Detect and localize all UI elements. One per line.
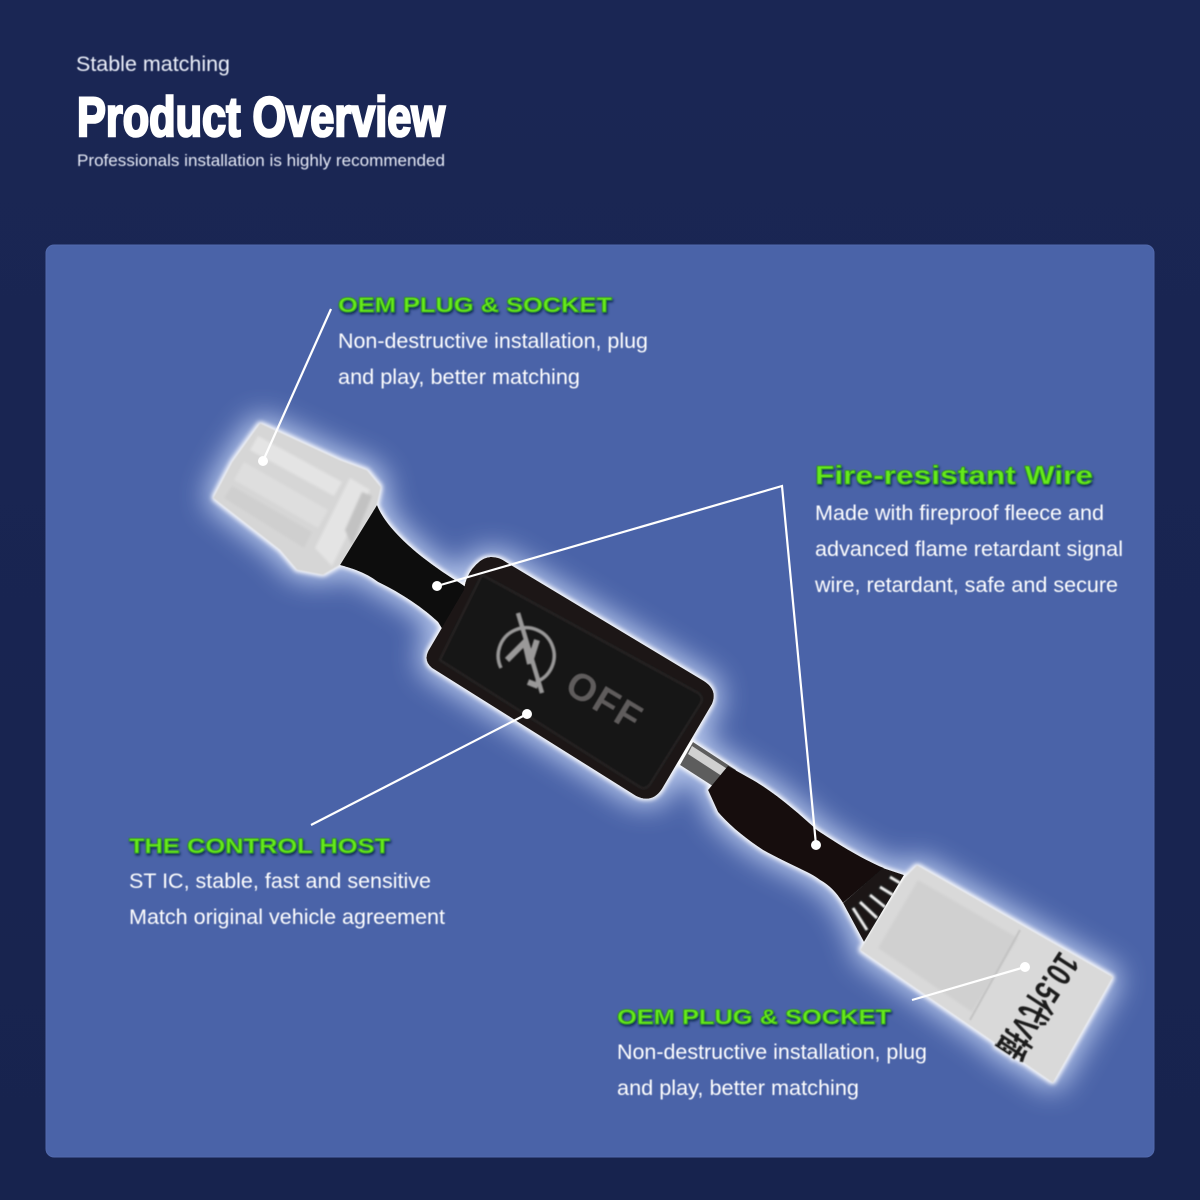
callout body: ST IC, stable, fast and sensitive	[129, 869, 431, 893]
off label: OFF	[558, 663, 650, 741]
callout: OEM plug top	[338, 294, 648, 389]
callout body	[814, 501, 1123, 597]
leader: fire-resistant wire	[437, 486, 816, 845]
callout heading: Fire-resistant Wire	[815, 460, 1093, 490]
header block	[76, 53, 445, 170]
leader lines	[263, 309, 1025, 1000]
callout body: wire, retardant, safe and secure	[814, 573, 1118, 597]
callout heading: OEM PLUG & SOCKET	[338, 294, 612, 317]
callout body: and play, better matching	[617, 1076, 859, 1100]
wire: lower	[708, 766, 884, 903]
wire: upper	[340, 505, 485, 650]
leader: right plug	[912, 967, 1025, 1000]
wire strands	[843, 868, 904, 942]
metal pin	[680, 742, 736, 792]
callout: fire-resistant wire	[814, 460, 1123, 597]
title: Product Overview	[77, 85, 445, 148]
leader dots	[258, 456, 1030, 972]
callout body: Non-destructive installation, plug	[617, 1040, 927, 1064]
callout body: Match original vehicle agreement	[129, 905, 445, 929]
panel: product diagram	[46, 245, 1154, 1157]
callout body	[338, 329, 648, 389]
callout heading: OEM PLUG & SOCKET	[617, 1006, 891, 1029]
callout: control host	[129, 835, 445, 929]
callout body: and play, better matching	[338, 365, 580, 389]
callout heading: THE CONTROL HOST	[129, 835, 390, 858]
subtitle: Professionals installation is highly recommended	[77, 151, 445, 170]
product: cable assembly	[213, 423, 1113, 1083]
callout: OEM plug bottom	[617, 1006, 927, 1100]
control host	[426, 557, 714, 799]
connector: right plug	[860, 865, 1113, 1083]
icon: auto stop off	[498, 613, 554, 693]
callout body	[617, 1040, 927, 1100]
printed label: 10.5代V插	[989, 946, 1086, 1066]
callout body: Non-destructive installation, plug	[338, 329, 648, 353]
leader: left plug	[263, 309, 331, 461]
connector: left plug	[213, 423, 381, 575]
callout body: Made with fireproof fleece and	[815, 501, 1104, 525]
leader: control host	[311, 714, 527, 825]
callout body: advanced flame retardant signal	[815, 537, 1123, 561]
eyebrow text: Stable matching	[76, 53, 230, 76]
callout body	[129, 869, 445, 929]
